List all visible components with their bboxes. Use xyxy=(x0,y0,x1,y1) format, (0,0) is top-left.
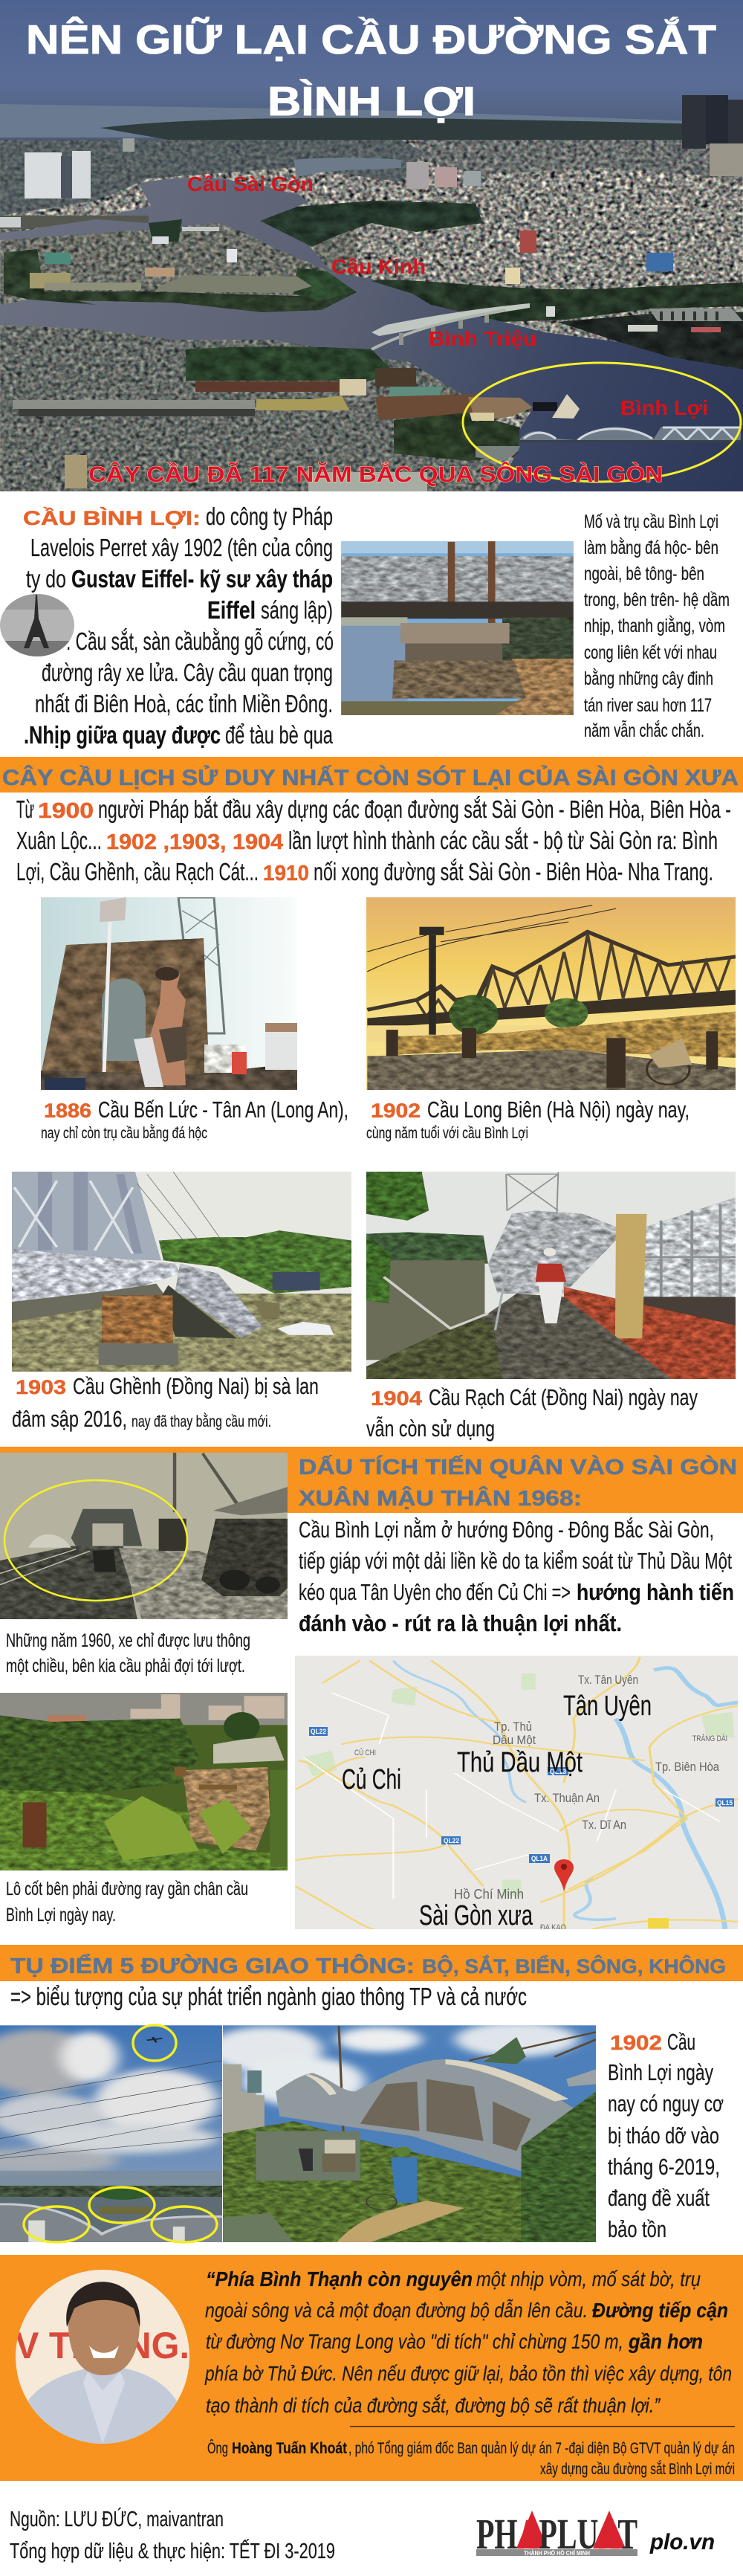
section heading band: giao thông xyxy=(0,1945,743,1981)
panel: Cầu Bình Lợi introduction text: sáng lập) xyxy=(261,596,333,624)
photo: Bình Lợi pier and girder xyxy=(341,540,574,717)
large map labels: Tân Uyên xyxy=(563,1691,652,1722)
text block: railway history xyxy=(16,795,731,885)
map labels: bridges on the river xyxy=(187,172,708,419)
caption: 1903: nay đã thay bằng cầu mới. xyxy=(132,1413,271,1430)
caption: pier materials: ngoài, bê tông- bên xyxy=(584,564,704,584)
photo: 1886 Bến Lức pier xyxy=(41,897,297,1090)
caption: 1886: 1886 xyxy=(44,1100,91,1122)
quote text: “Phía Bình Thạnh còn nguyên xyxy=(206,2267,473,2291)
map: Thủ Dầu Một to Sài Gòn corridor xyxy=(295,1656,738,1932)
section heading band: Mậu Thân 1968 xyxy=(0,1447,743,1513)
small map place names: CỦ CHI xyxy=(354,1748,376,1757)
quote text: tạo thành di tích của đường sắt, đường bộ sẽ rất thuận lợi.” xyxy=(206,2394,661,2417)
text block: Bình Lợi strategic location: kéo qua Tân Uyên cho đến Củ Chi => xyxy=(299,1579,571,1605)
text block: railway history: 1902 ,1903, 1904 xyxy=(106,830,283,854)
caption: proposal to preserve: Cầu xyxy=(667,2029,695,2055)
caption: bunker: Lô cốt bên phải đường ray gần chân cầu xyxy=(6,1879,248,1899)
panel: expert quote xyxy=(0,2255,743,2481)
road badges: QL15 xyxy=(717,1799,733,1807)
caption: 1903: Cầu Ghềnh (Đồng Nai) bị sà lan xyxy=(73,1373,319,1399)
quote text: một nhịp vòm, mố sát bờ, trụ xyxy=(476,2267,701,2291)
road badges: QL1A xyxy=(531,1855,548,1862)
panel: Cầu Bình Lợi introduction text: để tàu bè qua xyxy=(225,721,333,749)
small map place names: Dầu Một xyxy=(493,1733,536,1747)
photo: 1903 Ghềnh bridge collapse xyxy=(12,1172,352,1373)
logo: Pháp Luật plo.vn: THÀNH PHỐ HỒ CHÍ MINH xyxy=(524,2549,590,2557)
map labels: bridges on the river: Bình Lợi xyxy=(620,396,708,419)
caption: 1902 xyxy=(366,1097,690,1142)
caption: pier materials xyxy=(584,511,730,741)
small map place names: Hồ Chí Minh xyxy=(454,1887,524,1902)
panel: Cầu Bình Lợi introduction text xyxy=(23,503,334,749)
panel: Cầu Bình Lợi introduction text: ty do xyxy=(26,565,66,593)
large map labels xyxy=(342,1691,652,1931)
quote attribution xyxy=(207,2440,735,2478)
logo: Pháp Luật plo.vn: PHAPLUAT xyxy=(476,2510,637,2558)
road badges: QL22 xyxy=(311,1728,326,1735)
caption: 1960s traffic xyxy=(6,1630,250,1676)
section heading band: giao thông: TỤ ĐIỂM 5 ĐƯỜNG GIAO THÔNG: xyxy=(10,1953,415,1978)
footer: sources and credits: Tổng hợp dữ liệu & thực hiện: TẾT ĐI 3-2019 xyxy=(10,2538,335,2563)
section heading band: giao thông: BỘ, SẮT, BIỂN, SÔNG, KHÔNG xyxy=(422,1954,726,1978)
large map labels: Thủ Dầu Một xyxy=(457,1747,583,1778)
text block: railway history: Xuân Lộc... xyxy=(16,827,102,854)
hero caption: CÂY CẦU ĐÃ 117 NĂM BẮC QUA SÔNG SÀI GÒN xyxy=(88,462,663,487)
caption: 1902: cùng năm tuổi với cầu Bình Lợi xyxy=(366,1125,528,1142)
caption: proposal to preserve: 1902 xyxy=(610,2031,662,2054)
small map place names: TRẢNG DÀI xyxy=(692,1734,727,1743)
quote attribution: Hoàng Tuấn Khoát xyxy=(232,2440,347,2457)
caption: 1903: 1903 xyxy=(16,1376,66,1398)
caption: 1903: đâm sập 2016, xyxy=(12,1406,127,1432)
caption: proposal to preserve: đang đề xuất xyxy=(608,2185,710,2211)
small map place names: Tx. Dĩ An xyxy=(582,1818,626,1832)
caption: 1886: nay chỉ còn trụ cầu bằng đá hộc xyxy=(41,1125,207,1142)
highlight ellipse: bridge in old photo xyxy=(4,1480,187,1601)
panel: Cầu Bình Lợi introduction text: nhất đi Biên Hoà, các tỉnh Miền Đông. xyxy=(35,690,333,717)
large map labels: Sài Gòn xưa xyxy=(419,1900,533,1931)
panel: hero aerial photo of Saigon river xyxy=(0,0,743,491)
road badges: QL13 xyxy=(550,1768,566,1775)
road badges: QL22 xyxy=(444,1837,459,1844)
section heading band: lịch sử: CÂY CẦU LỊCH SỬ DUY NHẤT CÒN SÓT LẠI CỦA SÀI GÒN XƯA xyxy=(2,765,739,790)
small map place names: ĐA KAO xyxy=(540,1923,566,1932)
small map place names: Tx. Tân Uyên xyxy=(578,1673,638,1687)
caption: proposal to preserve xyxy=(608,2029,724,2242)
caption: 1904: 1904 xyxy=(371,1387,422,1410)
map labels: bridges on the river: Bình Triệu xyxy=(429,327,536,350)
footer: sources and credits xyxy=(10,2507,335,2563)
quote text xyxy=(204,2267,732,2417)
photo: old sepia picture of bridge in the 1960s xyxy=(0,1453,289,1620)
caption: 1902: 1902 xyxy=(371,1100,421,1122)
panel: Cầu Bình Lợi introduction text: . Cầu sắt, sàn cầubằng gỗ cứng, có xyxy=(66,627,334,655)
highlight ellipse: Bình Lợi bridge xyxy=(463,363,741,482)
subheading: transport symbol: => biểu tượng của sự phát triển ngành giao thông TP và cả nước xyxy=(10,1983,527,2010)
text block: railway history: 1910 xyxy=(263,862,309,885)
panel: Cầu Bình Lợi introduction text: do công ty Pháp xyxy=(206,503,333,530)
photo: 1902 Long Biên bridge xyxy=(366,895,737,1094)
photo: bunker near rail line xyxy=(0,1693,289,1872)
icon: map pin at Bình Lợi xyxy=(554,1859,574,1891)
caption: proposal to preserve: bảo tồn xyxy=(608,2216,666,2242)
quote text: gần hơn xyxy=(628,2330,703,2353)
panel: Cầu Bình Lợi introduction text: Gustav Eiffel- kỹ sư xây tháp xyxy=(71,565,333,593)
large map labels: Củ Chi xyxy=(342,1764,401,1795)
text block: Bình Lợi strategic location xyxy=(299,1517,734,1636)
caption: bunker xyxy=(6,1879,248,1925)
icon: Eiffel tower circular photo xyxy=(0,591,74,660)
text block: railway history: Lợi, Cầu Ghềnh, cầu Rạch Cát... xyxy=(16,858,259,885)
panel: Cầu Bình Lợi introduction text: .Nhịp giữa quay được xyxy=(24,721,221,749)
panel: Cầu Bình Lợi introduction text: Lavelois Perret xây 1902 (tên của công xyxy=(30,534,333,561)
caption: 1960s traffic: một chiều, bên kia cầu phải đợi tới lượt. xyxy=(6,1656,245,1676)
highlight circles: air, river, road and rail xyxy=(24,2025,217,2242)
text block: railway history: Từ xyxy=(16,795,34,823)
panel: Cầu Bình Lợi introduction text: CẦU BÌNH LỢI: xyxy=(23,506,201,529)
caption: 1904 xyxy=(366,1384,698,1442)
caption: bunker: Bình Lợi ngày nay. xyxy=(6,1905,116,1925)
title: NÊN GIỮ LẠI CẦU ĐƯỜNG SẮT xyxy=(26,16,716,62)
text block: Bình Lợi strategic location: đánh vào - rút ra là thuận lợi nhất. xyxy=(299,1610,622,1636)
portrait: Hoàng Tuấn Khoát: V TRỒNG. xyxy=(15,2325,189,2366)
map labels: bridges on the river: Cầu Kinh xyxy=(331,255,426,278)
section heading band: Mậu Thân 1968: XUÂN MẬU THÂN 1968: xyxy=(299,1485,582,1511)
logo: Pháp Luật plo.vn: plo.vn xyxy=(649,2530,715,2554)
quote text: Đường tiếp cận xyxy=(592,2299,728,2322)
small map place names: Tx. Thuận An xyxy=(534,1791,600,1805)
caption: 1960s traffic: Những năm 1960, xe chỉ được lưu thông xyxy=(6,1630,250,1651)
small map place names: Tp. Biên Hòa xyxy=(655,1760,719,1774)
map labels: bridges on the river: Cầu Sài Gòn xyxy=(187,172,314,196)
title xyxy=(26,16,716,124)
footer: sources and credits: Nguồn: LƯU ĐỨC, maivantran xyxy=(10,2507,224,2531)
photo: Bình Lợi steel arch bridge today xyxy=(209,2022,597,2244)
small map place names xyxy=(354,1673,727,1932)
panel: Cầu Bình Lợi introduction text: Eiffel xyxy=(207,596,256,624)
section heading band: Mậu Thân 1968: DẤU TÍCH TIẾN QUÂN VÀO SÀI GÒN xyxy=(299,1454,737,1479)
caption: 1904: vẫn còn sử dụng xyxy=(366,1415,495,1442)
quote text: từ đường Nơ Trang Long vào "di tích" chỉ chừng 150 m, xyxy=(206,2330,623,2353)
quote attribution: Ông xyxy=(207,2440,228,2457)
portrait: Hoàng Tuấn Khoát xyxy=(15,2270,190,2446)
photo: 1904 Rạch Cát bridge xyxy=(366,1172,737,1381)
panel: Cầu Bình Lợi introduction text: đường rây xe lửa. Cây cầu quan trọng xyxy=(42,659,333,686)
caption: 1903 xyxy=(12,1373,319,1432)
caption: 1886 xyxy=(41,1097,348,1142)
photo: sky, plane, boat and rail bridge xyxy=(0,2025,223,2243)
road badges xyxy=(309,1727,734,1928)
title: BÌNH LỢI xyxy=(267,78,476,124)
quote text: ngoài sông và cả một đoạn đường bộ dẫn lên cầu. xyxy=(205,2299,588,2322)
small map place names: Tp. Thủ xyxy=(494,1720,532,1734)
caption: 1886: Cầu Bến Lức - Tân An (Long An), xyxy=(98,1097,348,1123)
section heading band: lịch sử xyxy=(0,757,743,793)
text block: railway history: 1900 xyxy=(38,799,94,823)
